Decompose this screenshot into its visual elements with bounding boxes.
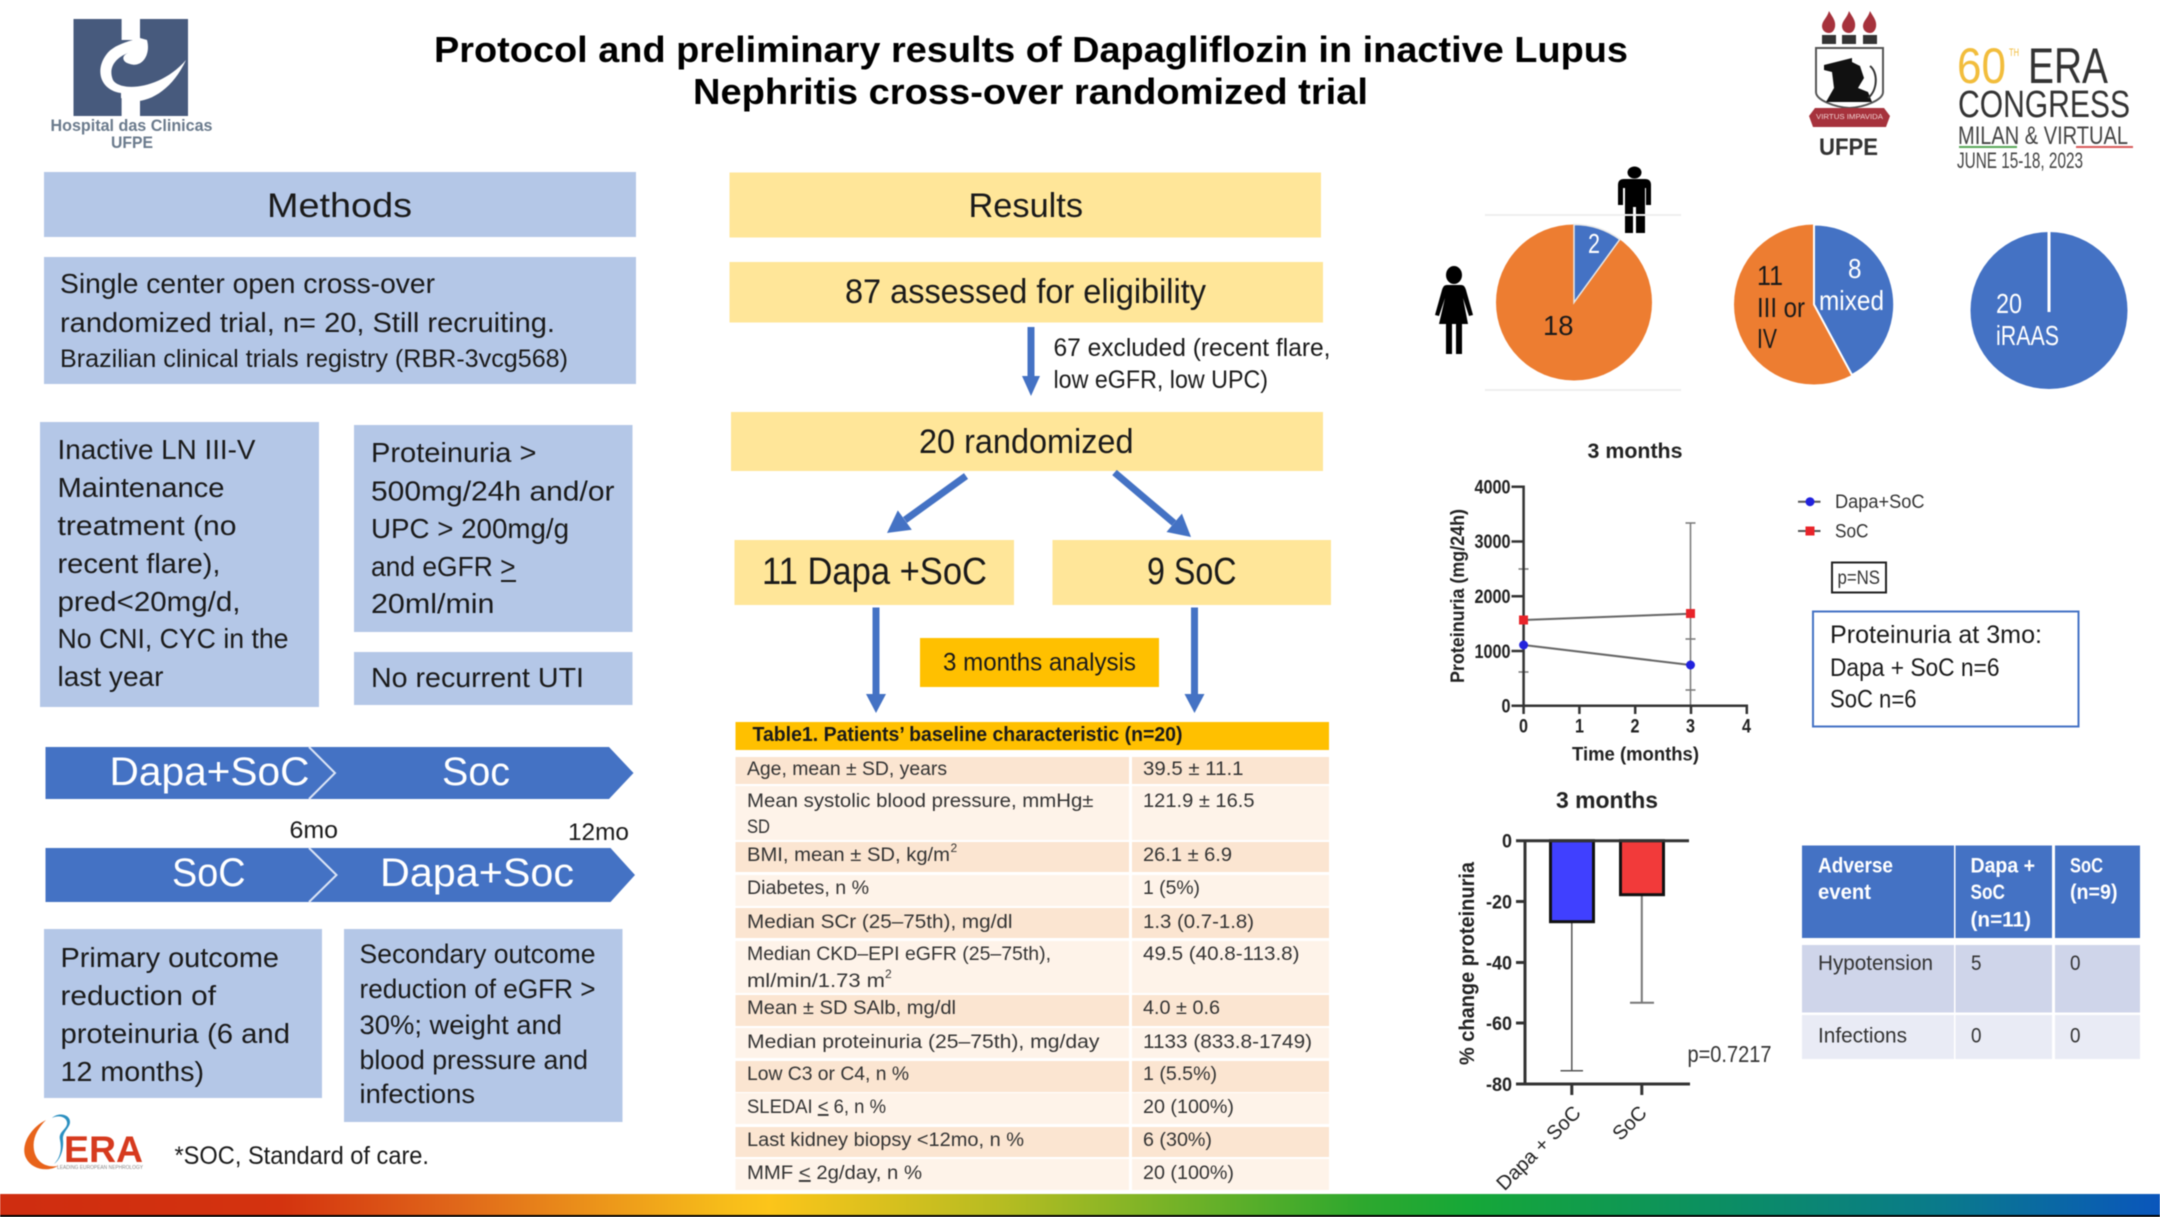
- logo: ERA: ERA: [64, 1129, 143, 1170]
- title: Nephritis cross-over randomized trial: [693, 71, 1368, 112]
- pie chart: lupus nephritis class: [1734, 224, 1894, 384]
- pie chart: sex distribution: 2: [1588, 228, 1600, 259]
- line chart: proteinuria over time: 0: [1502, 696, 1510, 718]
- panel: proteinuria criteria: 20ml/min: [371, 588, 494, 619]
- bar chart: percent change proteinuria: -80: [1486, 1075, 1512, 1096]
- table: adverse events: 0: [1971, 1024, 1982, 1048]
- panel: primary outcome: 12 months): [60, 1056, 204, 1087]
- label: 3 months analysis: [920, 638, 1159, 687]
- line chart: proteinuria over time: 2000: [1474, 587, 1510, 608]
- panel: secondary outcome: Secondary outcome: [360, 939, 596, 969]
- arrow: sequence Dapa+SoC then Soc: Dapa+SoC: [110, 750, 310, 794]
- bar chart: percent change proteinuria: SoC: [1608, 1102, 1652, 1145]
- panel: inclusion criteria: pred<20mg/d,: [58, 586, 240, 617]
- panel: secondary outcome: blood pressure and: [360, 1045, 588, 1075]
- arrow: sequence SoC then Dapa+Soc: SoC: [172, 851, 246, 895]
- callout: proteinuria at 3 months n: Proteinuria at 3mo:: [1830, 621, 2042, 649]
- panel: proteinuria criteria: and eGFR >: [371, 551, 516, 582]
- pie chart: sex distribution: [1485, 214, 1681, 391]
- panel: study design: randomized trial, n= 20, Still recruiting.: [60, 307, 555, 338]
- table: patients baseline characteristics: 39.5 ± 11.1: [1143, 759, 1244, 780]
- table: patients baseline characteristics: 121.9 ± 16.5: [1143, 791, 1254, 812]
- flow box: 11 Dapa + SoC: [734, 540, 1014, 605]
- timeline labels: 6mo and 12mo: 6mo: [290, 817, 338, 844]
- logo: UFPE crest: VIRTUS IMPAVIDA: [1816, 114, 1883, 121]
- callout: p=NS: p=NS: [1838, 568, 1880, 589]
- table: adverse events: Infections: [1818, 1024, 1907, 1048]
- panel: results heading: Results: [968, 187, 1083, 225]
- panel: proteinuria criteria: Proteinuria >: [371, 437, 536, 468]
- panel: secondary outcome: 30%; weight and: [360, 1010, 562, 1040]
- panel: inclusion criteria: recent flare),: [58, 548, 220, 579]
- table: patients baseline characteristics: ml/min/1.73 m: [747, 971, 885, 992]
- flow box: 87 assessed: 87 assessed for eligibility: [845, 273, 1206, 311]
- line chart: proteinuria over time: 1000: [1474, 642, 1510, 663]
- title: [434, 29, 1628, 112]
- logo: UFPE crest: [1809, 11, 1890, 161]
- table: patients baseline characteristics: SD: [747, 817, 770, 838]
- table: patients baseline characteristics: 1 (5.5%): [1143, 1064, 1217, 1085]
- bar chart: percent change proteinuria: -40: [1486, 954, 1512, 974]
- table: patients baseline characteristics: Median proteinuria (25–75th), mg/day: [747, 1032, 1100, 1053]
- panel: primary outcome: proteinuria (6 and: [60, 1018, 290, 1049]
- panel: inclusion criteria: Maintenance: [58, 472, 224, 503]
- table: adverse events: 0: [2070, 952, 2080, 975]
- title: Protocol and preliminary results of Dapagliflozin in inactive Lupus: [434, 29, 1628, 70]
- logo: 60th ERA Congress: ERA: [2028, 38, 2109, 94]
- panel: secondary outcome: infections: [360, 1079, 475, 1109]
- panel: inclusion criteria: [40, 422, 319, 707]
- panel: methods heading: [44, 172, 636, 237]
- panel: inclusion criteria: last year: [58, 661, 164, 692]
- text: excluded: [1054, 334, 1330, 394]
- table: adverse events: SoC: [1970, 881, 2005, 904]
- line chart: proteinuria over time: 0: [1519, 716, 1528, 738]
- table: adverse events: (n=9): [2070, 881, 2118, 904]
- callout: proteinuria at 3 months n: SoC n=6: [1830, 686, 1916, 714]
- table: adverse events: Hypotension: [1818, 952, 1933, 975]
- text: excluded: low eGFR, low UPC): [1054, 366, 1268, 394]
- line chart: proteinuria over time: 4000: [1474, 478, 1510, 498]
- footer: rainbow band: [0, 1194, 2160, 1217]
- icon: man: [1618, 166, 1651, 233]
- flow box: 9 SoC: 9 SoC: [1147, 551, 1236, 593]
- table: patients baseline characteristics: Table1. Patients’ baseline characteristic (n=20): [752, 724, 1182, 746]
- flow box: 11 Dapa + SoC: 11 Dapa +SoC: [762, 551, 987, 593]
- legend: line chart series: [1798, 492, 1924, 542]
- table: adverse events: SoC: [2070, 854, 2103, 878]
- line chart: proteinuria over time: [1448, 440, 1751, 766]
- table: patients baseline characteristics: Age, mean ± SD, years: [747, 759, 947, 780]
- bar chart: percent change proteinuria: Dapa + SoC: [1493, 1102, 1586, 1195]
- table: patients baseline characteristics: SLEDAI < 6, n %: [747, 1097, 886, 1118]
- table: adverse events: Adverse: [1818, 854, 1893, 878]
- line chart: proteinuria over time: 4: [1742, 716, 1751, 738]
- bar chart: percent change proteinuria: -60: [1486, 1014, 1512, 1035]
- table: patients baseline characteristics: 1.3 (0.7-1.8): [1143, 912, 1254, 933]
- pie chart: iRAAS use: [1970, 231, 2128, 389]
- table: patients baseline characteristics: 6 (30%): [1143, 1130, 1212, 1151]
- table: patients baseline characteristics: Median SCr (25–75th), mg/dl: [747, 912, 1012, 933]
- logo: Hospital das Clinicas UFPE: [50, 19, 212, 152]
- arrow: SoC arm down to table: [1184, 608, 1204, 713]
- logo: Hospital das Clinicas UFPE: Hospital das Clinicas: [50, 116, 212, 135]
- table: patients baseline characteristics: 2: [885, 967, 892, 981]
- panel: primary outcome: reduction of: [60, 980, 216, 1011]
- callout: p=NS: [1832, 562, 1886, 592]
- table: patients baseline characteristics: Diabetes, n %: [747, 878, 869, 899]
- arrow: randomized to Dapa arm: [887, 476, 966, 533]
- panel: study design: Brazilian clinical trials registry (RBR-3vcg568): [60, 345, 568, 373]
- panel: proteinuria criteria: [354, 425, 632, 632]
- pie chart: iRAAS use: 20: [1996, 288, 2022, 319]
- pie chart: iRAAS use: iRAAS: [1996, 320, 2059, 351]
- panel: primary outcome: Primary outcome: [60, 942, 279, 973]
- flow box: 20 randomized: 20 randomized: [919, 423, 1134, 461]
- table: patients baseline characteristics: 1133 (833.8-1749): [1143, 1032, 1312, 1053]
- table: patients baseline characteristics: Mean ± SD SAlb, mg/dl: [747, 998, 956, 1019]
- panel: proteinuria criteria: UPC > 200mg/g: [371, 513, 569, 544]
- table: patients baseline characteristics: Mean systolic blood pressure, mmHg±: [747, 791, 1094, 812]
- panel: methods heading: Methods: [267, 187, 412, 225]
- line chart: proteinuria over time: 3 months: [1588, 440, 1682, 463]
- arrow: randomized to SoC arm: [1114, 472, 1191, 537]
- panel: inclusion criteria: treatment (no: [58, 510, 236, 541]
- arrow: sequence Dapa+SoC then Soc: Soc: [442, 750, 510, 794]
- logo: 60th ERA Congress: 60: [1957, 38, 2006, 94]
- table: adverse events: event: [1818, 881, 1871, 904]
- legend: line chart series: Dapa+SoC: [1835, 492, 1924, 513]
- table: patients baseline characteristics: Median CKD–EPI eGFR (25–75th),: [747, 944, 1051, 965]
- table: patients baseline characteristics: 26.1 ± 6.9: [1143, 845, 1232, 866]
- line chart: proteinuria over time: Time (months): [1572, 744, 1699, 766]
- logo: ERA: LEADING EUROPEAN NEPHROLOGY: [57, 1165, 144, 1171]
- arrow: assessed to randomized: [1022, 327, 1040, 396]
- table: patients baseline characteristics: Last kidney biopsy <12mo, n %: [747, 1130, 1024, 1151]
- text: excluded: 67 excluded (recent flare,: [1054, 334, 1330, 362]
- bar chart: percent change proteinuria: 0: [1502, 832, 1512, 852]
- flow box: 9 SoC: [1052, 540, 1331, 605]
- panel: inclusion criteria: No CNI, CYC in the: [58, 623, 288, 654]
- annotation: p value: p=0.7217: [1688, 1041, 1772, 1067]
- logo: 60th ERA Congress: [1957, 38, 2133, 173]
- legend: line chart series: SoC: [1835, 522, 1868, 542]
- line chart: proteinuria over time: Proteinuria (mg/24h): [1448, 509, 1469, 683]
- callout: proteinuria at 3 months n: Dapa + SoC n=6: [1830, 654, 2000, 682]
- table: adverse events: 5: [1971, 952, 1982, 975]
- line chart: proteinuria over time: 3: [1686, 716, 1695, 738]
- table: adverse events: (n=11): [1970, 908, 2031, 932]
- bar chart: percent change proteinuria: % change proteinuria: [1456, 862, 1479, 1065]
- panel: study design: Single center open cross-over: [60, 268, 435, 299]
- table: patients baseline characteristics: 4.0 ± 0.6: [1143, 998, 1220, 1019]
- table: adverse events: [1802, 846, 2140, 1059]
- footnote: SOC definition: *SOC, Standard of care.: [174, 1142, 429, 1170]
- logo: UFPE crest: UFPE: [1819, 134, 1878, 161]
- table: patients baseline characteristics: 1 (5%): [1143, 878, 1200, 899]
- table: patients baseline characteristics: 20 (100%): [1143, 1163, 1234, 1184]
- table: adverse events: Dapa +: [1970, 854, 2035, 878]
- bar chart: percent change proteinuria: -20: [1486, 892, 1512, 914]
- arrow: Dapa arm down to table: [866, 608, 886, 713]
- bar chart: percent change proteinuria: 3 months: [1556, 787, 1658, 813]
- pie chart: lupus nephritis class: 8: [1848, 253, 1862, 284]
- icon: woman: [1435, 266, 1473, 354]
- pie chart: lupus nephritis class: mixed: [1819, 285, 1884, 316]
- table: patients baseline characteristics: 20 (100%): [1143, 1097, 1234, 1118]
- table: patients baseline characteristics: BMI, mean ± SD, kg/m: [747, 845, 950, 866]
- table: patients baseline characteristics: MMF < 2g/day, n %: [747, 1163, 922, 1184]
- bar chart: percent change proteinuria: [1456, 787, 1690, 1195]
- table: patients baseline characteristics: 2: [950, 841, 958, 855]
- panel: secondary outcome: reduction of eGFR >: [360, 974, 596, 1004]
- table: patients baseline characteristics: Low C3 or C4, n %: [747, 1064, 909, 1085]
- panel: results heading: [730, 172, 1321, 238]
- timeline labels: 6mo and 12mo: [290, 817, 629, 846]
- arrow: sequence SoC then Dapa+Soc: Dapa+Soc: [380, 851, 574, 895]
- pie chart: lupus nephritis class: IV: [1757, 323, 1777, 354]
- panel: no recurrent UTI: No recurrent UTI: [371, 662, 584, 693]
- panel: inclusion criteria: Inactive LN III-V: [58, 434, 256, 465]
- table: adverse events: 0: [2070, 1024, 2080, 1048]
- table: patients baseline characteristics: [736, 722, 1329, 1190]
- line chart: proteinuria over time: 3000: [1474, 532, 1510, 553]
- panel: no recurrent UTI: [354, 652, 632, 705]
- logo: Hospital das Clinicas UFPE: UFPE: [111, 133, 153, 152]
- pie chart: lupus nephritis class: 11: [1757, 260, 1783, 291]
- arrow: sequence SoC then Dapa+Soc: [46, 848, 635, 902]
- timeline labels: 6mo and 12mo: 12mo: [568, 819, 629, 846]
- panel: secondary outcome: [344, 929, 622, 1122]
- panel: primary outcome: [44, 929, 322, 1098]
- pie chart: lupus nephritis class: III or: [1757, 292, 1805, 323]
- flow box: 20 randomized: [731, 412, 1323, 471]
- logo: 60th ERA Congress: JUNE 15-18, 2023: [1957, 148, 2083, 173]
- arrow: sequence Dapa+SoC then Soc: [46, 747, 634, 799]
- line chart: proteinuria over time: 1: [1575, 716, 1584, 738]
- panel: study design: [44, 257, 636, 384]
- logo: ERA: [24, 1115, 144, 1171]
- logo: 60th ERA Congress: TH: [2009, 47, 2019, 59]
- flow box: 87 assessed: [730, 262, 1323, 322]
- label: 3 months analysis: 3 months analysis: [943, 648, 1136, 676]
- panel: proteinuria criteria: 500mg/24h and/or: [371, 476, 614, 506]
- table: patients baseline characteristics: 49.5 (40.8-113.8): [1143, 944, 1300, 965]
- pie chart: sex distribution: 18: [1543, 310, 1574, 341]
- line chart: proteinuria over time: 2: [1630, 716, 1640, 738]
- callout: proteinuria at 3 months n: [1813, 612, 2078, 726]
